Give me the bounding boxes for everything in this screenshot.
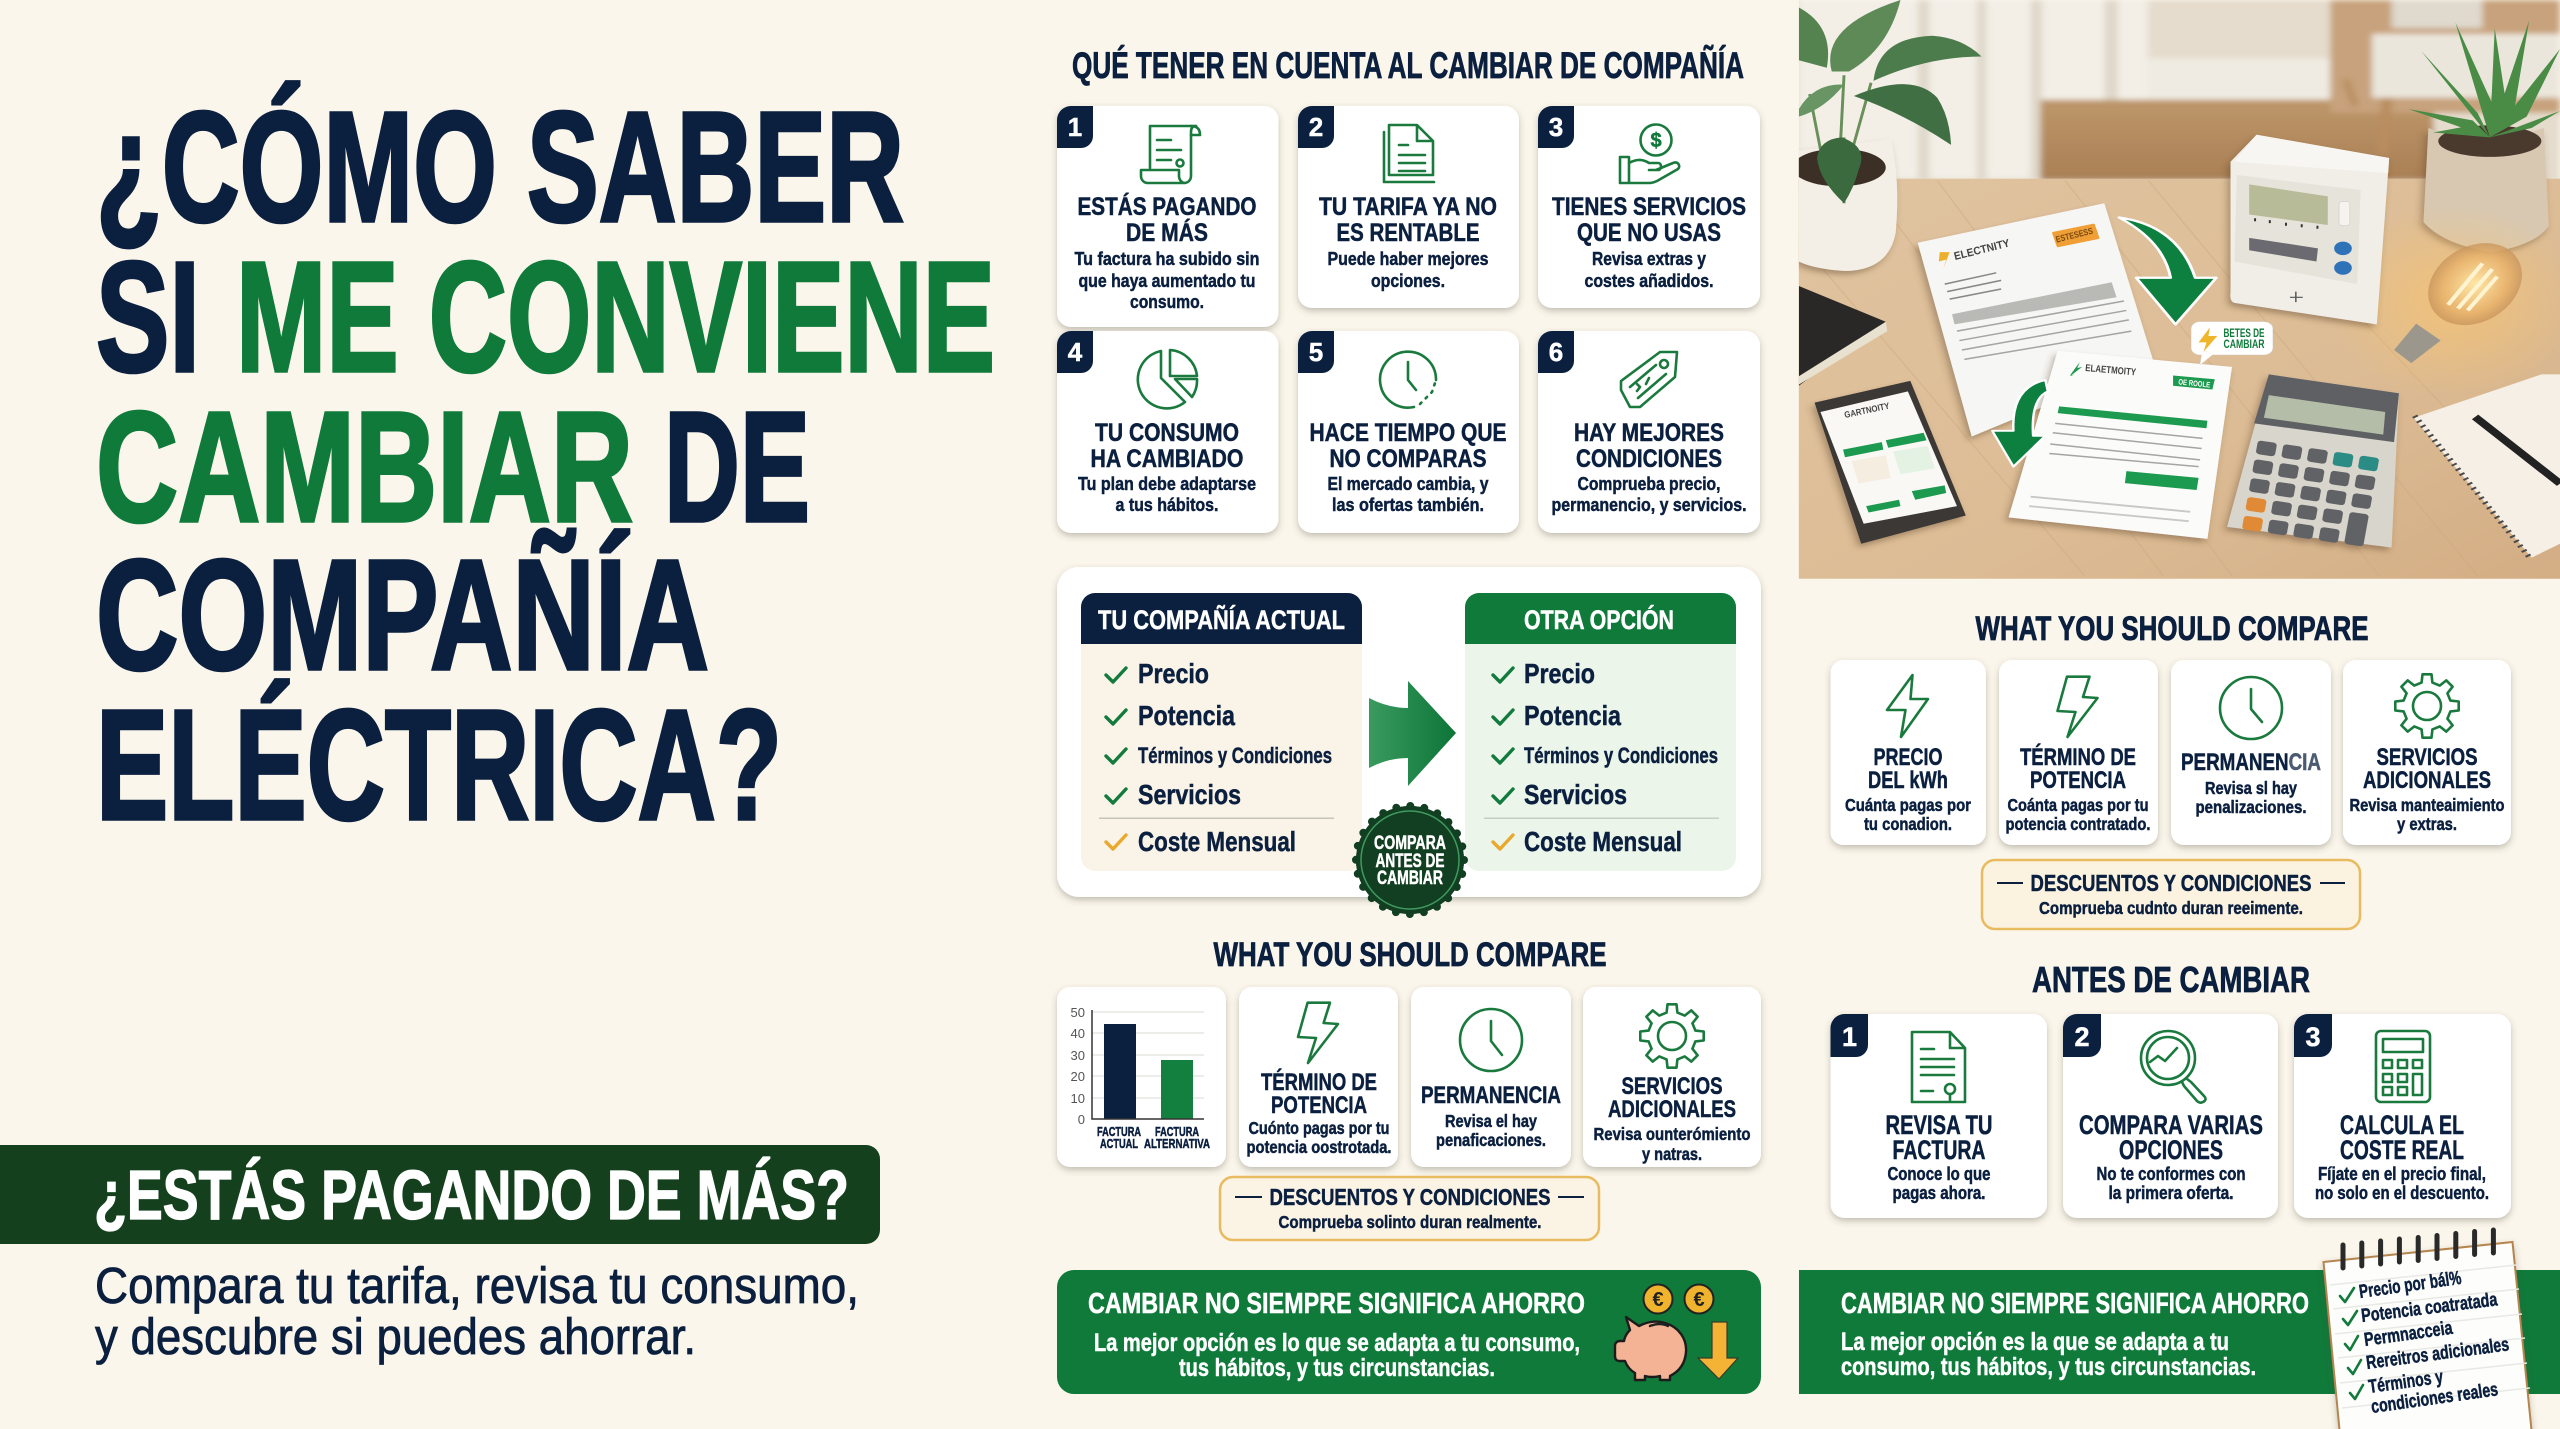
column: otra opción: OTRA OPCIÓN xyxy=(1524,604,1674,635)
step 1: pagas ahora. xyxy=(1892,1183,1986,1203)
icon: piggy bank with coins and down arrow xyxy=(1615,1284,1738,1380)
card: término de potencia: potencia oostrotada. xyxy=(1246,1137,1392,1157)
banner: cambiar no siempre significa ahorro (center): tus hábitos, y tus circunstancias. xyxy=(1179,1354,1495,1382)
panel: antes de cambiar steps xyxy=(1830,1014,2511,1218)
column: tu compañía actual xyxy=(1081,593,1362,871)
icon: magnifier xyxy=(2141,1031,2206,1103)
card 3: 3 xyxy=(1549,112,1563,142)
icon: calculator xyxy=(2376,1031,2430,1102)
banner: cambiar no siempre significa ahorro (right): CAMBIAR NO SIEMPRE SIGNIFICA AHORRO xyxy=(1841,1288,2309,1320)
bar chart: 10 xyxy=(1071,1091,1085,1106)
step 1: FACTURA xyxy=(1892,1135,1986,1165)
notepad checklist: Rereitros adicionales xyxy=(2365,1334,2510,1374)
card: precio del kWh: tu conadion. xyxy=(1864,814,1952,834)
step 3: COSTE REAL xyxy=(2340,1135,2464,1165)
title: ¿CÓMO SABER xyxy=(96,80,904,255)
card: precio del kWh: Cuánta pagas por xyxy=(1845,795,1971,815)
card 6: CONDICIONES xyxy=(1576,445,1722,473)
card 1: 1 xyxy=(1068,112,1082,142)
column: otra opción: Coste Mensual xyxy=(1524,826,1682,857)
column: tu compañía actual: TU COMPAÑÍA ACTUAL xyxy=(1098,604,1345,635)
card 2: opciones. xyxy=(1371,270,1445,291)
card: permanencia xyxy=(2171,660,2331,845)
card 3: Revisa extras y xyxy=(1592,248,1707,269)
card 5: 5 xyxy=(1309,337,1323,367)
arrow: curved green top xyxy=(2119,218,2216,324)
photo: desk with bills, meter and calculator: ELECTNITY xyxy=(1953,237,2012,263)
bar chart: 50 xyxy=(1071,1005,1085,1020)
text block: compara tu tarifa xyxy=(95,1257,859,1365)
seal: compara antes de cambiar: CAMBIAR xyxy=(1377,868,1443,889)
title: ELÉCTRICA? xyxy=(96,678,782,853)
banner: cambiar no siempre significa ahorro (right) xyxy=(1799,1270,2560,1394)
card 4 xyxy=(1057,331,1278,533)
card: servicios adicionales: y natras. xyxy=(1642,1144,1702,1164)
bar chart: ACTUAL xyxy=(1100,1136,1138,1151)
card 4: a tus hábitos. xyxy=(1116,494,1218,515)
icon: clock xyxy=(1460,1009,1522,1071)
card 3: QUE NO USAS xyxy=(1577,219,1721,247)
icon: piggy bank with coins and down arrow: € xyxy=(1652,1289,1664,1311)
bill: current xyxy=(1918,203,2153,437)
notepad checklist: Términos y xyxy=(2367,1367,2445,1398)
card 3: TIENES SERVICIOS xyxy=(1552,193,1746,221)
card: término de potencia xyxy=(1239,987,1398,1167)
card: permanencia: PERMANENCIA xyxy=(1421,1082,1561,1109)
notepad checklist: Permnacceia xyxy=(2363,1318,2454,1351)
bar chart: FACTURA xyxy=(1097,1124,1141,1139)
notebook black xyxy=(1799,286,1886,386)
card: término de potencia: TÉRMINO DE xyxy=(1261,1068,1377,1096)
banner: cambiar no siempre significa ahorro (right): consumo, tus hábitos, y tus circunstancias. xyxy=(1841,1353,2256,1381)
card: servicios adicionales xyxy=(1583,987,1761,1167)
step 1: Conoce lo que xyxy=(1888,1164,1990,1184)
notepad checklist: Potencia coatratada xyxy=(2360,1289,2499,1327)
phone xyxy=(1815,381,1966,544)
card 1: Tu factura ha subido sin xyxy=(1074,248,1260,269)
bulb xyxy=(2394,243,2522,363)
bar chart xyxy=(1057,987,1226,1167)
card: servicios adicionales: SERVICIOS xyxy=(1622,1073,1722,1100)
card 2: ES RENTABLE xyxy=(1336,219,1480,247)
banner: cambiar no siempre significa ahorro (center): CAMBIAR NO SIEMPRE SIGNIFICA AHORRO xyxy=(1088,1288,1585,1320)
notepad checklist: condiciones reales xyxy=(2370,1379,2499,1418)
card: precio del kWh: PRECIO xyxy=(1874,744,1942,771)
card 4: TU CONSUMO xyxy=(1095,419,1239,447)
icon: document xyxy=(1384,125,1434,182)
column: tu compañía actual: Términos y Condiciones xyxy=(1138,743,1332,768)
card 4: 4 xyxy=(1068,337,1083,367)
step 3: CALCULA EL xyxy=(2340,1110,2464,1140)
card: permanencia: penaficaciones. xyxy=(1436,1130,1546,1150)
plant left xyxy=(1792,0,1982,271)
card: término de potencia: TÉRMINO DE xyxy=(2020,743,2136,771)
photo: desk with bills, meter and calculator: GARTNOITY xyxy=(1843,401,1890,420)
callout: descuentos y condiciones (center): Comprueba solinto duran realmente. xyxy=(1278,1212,1542,1232)
card: término de potencia: Coánta pagas por tu xyxy=(2008,795,2148,815)
seal: compara antes de cambiar xyxy=(1356,806,1464,914)
plant right xyxy=(2409,21,2560,252)
arrow: curved green bottom xyxy=(1992,380,2048,467)
step 2 xyxy=(2063,1014,2278,1218)
card: término de potencia: POTENCIA xyxy=(1271,1092,1367,1119)
title xyxy=(96,80,995,853)
callout: descuentos y condiciones (right): Comprueba cudnto duran reeimente. xyxy=(2039,898,2303,918)
card 5: El mercado cambia, y xyxy=(1328,473,1489,494)
text block: compara tu tarifa: Compara tu tarifa, revisa tu consumo, xyxy=(95,1257,859,1314)
card 1 xyxy=(1057,106,1278,327)
card: servicios adicionales: Revisa ounterómiento xyxy=(1594,1124,1750,1144)
icon: coin and hand xyxy=(1620,124,1679,183)
title: COMPAÑÍA xyxy=(96,528,709,703)
notepad checklist: Precio por bál% xyxy=(2358,1268,2463,1303)
callout: descuentos y condiciones (right) xyxy=(1982,860,2360,929)
card 4: HA CAMBIADO xyxy=(1090,445,1244,473)
bar chart: ALTERNATIVA xyxy=(1144,1136,1210,1151)
column: otra opción: Servicios xyxy=(1524,779,1627,810)
step 1: REVISA TU xyxy=(1886,1110,1992,1140)
bar chart: 40 xyxy=(1071,1026,1085,1041)
step 3: 3 xyxy=(2305,1022,2321,1052)
icon: lightning bolt xyxy=(2058,677,2098,737)
icon: gear xyxy=(2395,674,2459,738)
card: permanencia: PERMANENCIA xyxy=(2181,749,2321,776)
icon: piggy bank with coins and down arrow: € xyxy=(1693,1289,1705,1311)
card 6: permanencio, y servicios. xyxy=(1552,494,1746,515)
card 1: DE MÁS xyxy=(1126,218,1208,247)
title: DE xyxy=(664,380,810,555)
card 3: $ xyxy=(1650,130,1662,152)
panel: comparison xyxy=(1057,567,1761,914)
bulb glow xyxy=(2370,221,2542,368)
icon: gear xyxy=(1640,1004,1704,1068)
photo: desk with bills, meter and calculator: BETES DE xyxy=(2224,326,2264,340)
bill: alternative xyxy=(2009,351,2232,539)
card 4: Tu plan debe adaptarse xyxy=(1078,473,1256,494)
icon: clock xyxy=(2220,677,2282,739)
bar chart: 20 xyxy=(1071,1069,1085,1084)
title: SI xyxy=(96,230,200,405)
icon: lightning bolt xyxy=(1887,675,1928,737)
card: precio del kWh: DEL kWh xyxy=(1868,767,1948,794)
card: servicios adicionales: Revisa manteaimiento xyxy=(2350,795,2504,815)
card 5: HACE TIEMPO QUE xyxy=(1310,419,1506,447)
photo: desk with bills, meter and calculator: ELAETMOITY xyxy=(2085,363,2137,378)
panel: what you should compare cards (right) xyxy=(1830,660,2511,845)
card 1: ESTÁS PAGANDO xyxy=(1078,192,1256,221)
card 6: Comprueba precio, xyxy=(1578,473,1720,494)
photo: desk with bills, meter and calculator: CAMBIAR xyxy=(2224,337,2265,351)
step 3: Fíjate en el precio final, xyxy=(2318,1164,2486,1184)
panel: what you should compare cards (center) xyxy=(1057,987,1761,1167)
step 1 xyxy=(1830,1014,2047,1218)
panel: six reasons xyxy=(1057,106,1760,533)
banner: cambiar no siempre significa ahorro (right): La mejor opción es la que se adapta a tu xyxy=(1841,1328,2229,1356)
step 2: la primera oferta. xyxy=(2108,1183,2234,1203)
step 2: COMPARA VARIAS xyxy=(2079,1110,2263,1140)
table xyxy=(1790,179,2560,581)
column: otra opción: Potencia xyxy=(1524,700,1621,731)
card 3 xyxy=(1538,106,1760,308)
title: CAMBIAR xyxy=(96,380,633,555)
heading: what you should compare (center): WHAT YOU SHOULD COMPARE xyxy=(1214,936,1606,974)
step 1: 1 xyxy=(1842,1022,1857,1052)
card: permanencia xyxy=(1411,987,1571,1167)
bar chart: 0 xyxy=(1078,1112,1085,1127)
notepad xyxy=(2414,374,2560,558)
column: otra opción xyxy=(1465,593,1736,871)
icon: price tag xyxy=(1621,352,1677,407)
callout: estás pagando de más xyxy=(0,1145,880,1244)
column: tu compañía actual: Coste Mensual xyxy=(1138,826,1296,857)
banner: cambiar no siempre significa ahorro (center) xyxy=(1057,1270,1761,1394)
card: término de potencia: Cuónto pagas por tu xyxy=(1248,1118,1390,1138)
card: término de potencia xyxy=(1999,660,2158,845)
callout: descuentos y condiciones (right): DESCUENTOS Y CONDICIONES xyxy=(2030,870,2312,896)
calculator xyxy=(2227,374,2399,548)
card 2 xyxy=(1298,106,1519,308)
card 5 xyxy=(1298,331,1519,533)
card: servicios adicionales: ADICIONALES xyxy=(1608,1096,1736,1123)
column: tu compañía actual: Servicios xyxy=(1138,779,1241,810)
photo: desk with bills, meter and calculator: OE ROOLE xyxy=(2178,377,2211,390)
card: precio del kWh xyxy=(1830,660,1986,845)
heading: what you should compare (right): WHAT YOU SHOULD COMPARE xyxy=(1976,610,2368,648)
card: término de potencia: potencia contratado. xyxy=(2006,814,2150,834)
card: permanencia: Revisa sl hay xyxy=(2205,778,2297,798)
step 2: 2 xyxy=(2074,1022,2090,1052)
column: tu compañía actual: Potencia xyxy=(1138,700,1235,731)
card 3: costes añadidos. xyxy=(1584,270,1714,291)
step 3: no solo en el descuento. xyxy=(2315,1183,2489,1203)
card: permanencia: penalizaciones. xyxy=(2196,797,2306,817)
icon: invoice scroll xyxy=(1141,126,1200,183)
card 2: Puede haber mejores xyxy=(1328,248,1488,269)
card 5: las ofertas también. xyxy=(1332,494,1484,515)
column: otra opción: Precio xyxy=(1524,658,1595,689)
arrow xyxy=(1369,681,1456,786)
title: ME CONVIENE xyxy=(236,230,995,405)
card 2: TU TARIFA YA NO xyxy=(1319,193,1497,221)
callout: descuentos y condiciones (center) xyxy=(1220,1177,1599,1240)
card: permanencia: Revisa el hay xyxy=(1445,1111,1537,1131)
text block: compara tu tarifa: y descubre si puedes ahorrar. xyxy=(95,1308,696,1365)
card: término de potencia: POTENCIA xyxy=(2030,767,2126,794)
column: tu compañía actual: Precio xyxy=(1138,658,1209,689)
bubble xyxy=(2191,322,2273,365)
bar chart: 30 xyxy=(1071,1048,1085,1063)
card: servicios adicionales: y extras. xyxy=(2397,814,2457,834)
bar chart: FACTURA xyxy=(1155,1124,1199,1139)
step 2: No te conformes con xyxy=(2096,1164,2246,1184)
card 2: 2 xyxy=(1309,112,1323,142)
column: otra opción: Términos y Condiciones xyxy=(1524,743,1718,768)
banner: cambiar no siempre significa ahorro (center): La mejor opción es lo que se adapta a tu consumo, xyxy=(1094,1329,1580,1357)
icon: clock xyxy=(1380,352,1436,408)
card 6: 6 xyxy=(1549,337,1563,367)
card 5: NO COMPARAS xyxy=(1330,445,1486,473)
photo: desk with bills, meter and calculator xyxy=(1790,0,2560,581)
card 6: HAY MEJORES xyxy=(1574,419,1724,447)
card: servicios adicionales: ADICIONALES xyxy=(2363,767,2491,794)
heading: antes de cambiar: ANTES DE CAMBIAR xyxy=(2032,959,2310,1000)
card: servicios adicionales: SERVICIOS xyxy=(2376,744,2478,771)
card 1: consumo. xyxy=(1130,291,1204,312)
wall and curtains xyxy=(1790,0,2560,188)
card 1: que haya aumentado tu xyxy=(1078,270,1256,291)
seal: compara antes de cambiar: ANTES DE xyxy=(1376,851,1444,872)
smart meter xyxy=(2230,135,2389,324)
step 3 xyxy=(2294,1014,2511,1218)
icon: lightning bolt xyxy=(1298,1003,1338,1063)
icon: bill xyxy=(1912,1032,1965,1102)
callout: estás pagando de más: ¿ESTÁS PAGANDO DE MÁS? xyxy=(94,1156,849,1234)
icon: pie chart xyxy=(1138,350,1197,408)
seal: compara antes de cambiar: COMPARA xyxy=(1374,833,1446,854)
notepad checklist xyxy=(2324,1230,2532,1429)
step 2: OPCIONES xyxy=(2119,1135,2223,1165)
card 6 xyxy=(1538,331,1760,533)
card: servicios adicionales xyxy=(2343,660,2511,845)
callout: descuentos y condiciones (center): DESCUENTOS Y CONDICIONES xyxy=(1270,1184,1550,1210)
heading: qué tener en cuenta: QUÉ TENER EN CUENTA AL CAMBIAR DE COMPAÑÍA xyxy=(1072,44,1744,86)
photo: desk with bills, meter and calculator: ESTESESS xyxy=(2055,226,2094,245)
